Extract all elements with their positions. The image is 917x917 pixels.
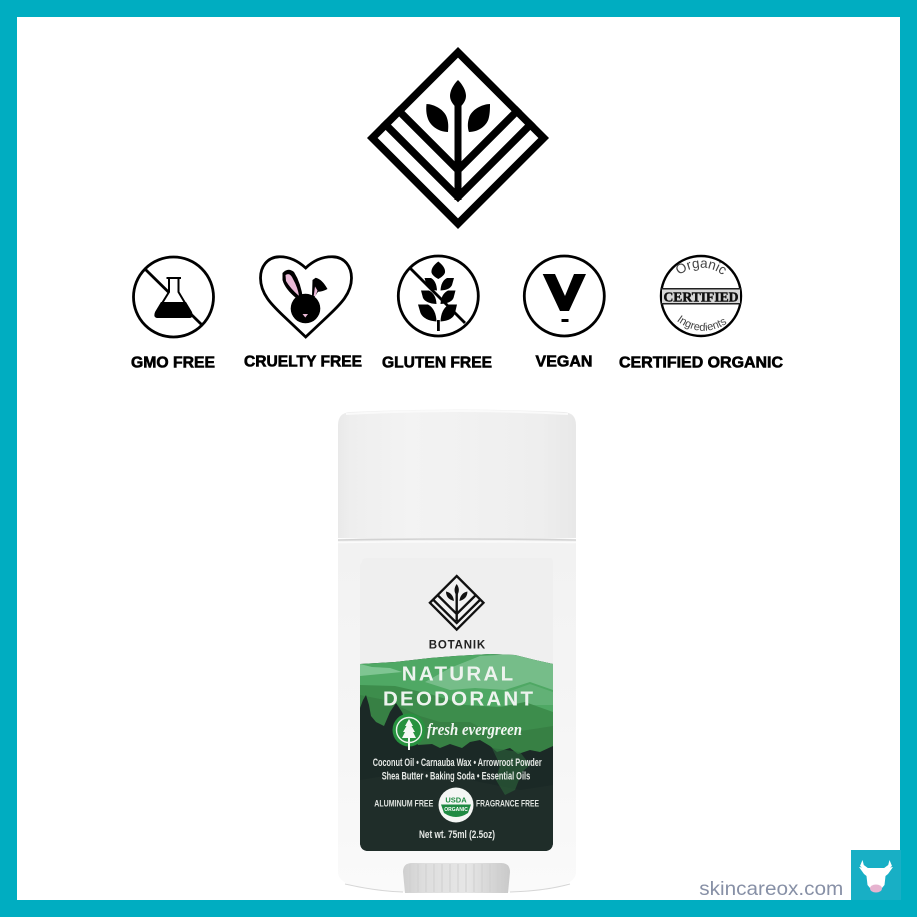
BOTANIK wordmark: BOTANIK [429,640,486,652]
feature labels: GMO FREE [131,354,215,372]
product title: DEODORANT [383,688,533,710]
bottle body [338,540,576,893]
mini logo [430,576,484,630]
rabbit head [291,294,320,323]
twist knob [403,863,510,893]
scent name: fresh evergreen [427,720,522,739]
USDA organic seal: ORGANIC [444,807,468,813]
net weight: Net wt. 75ml (2.5oz) [419,829,495,841]
deodorant stick product [338,410,576,893]
free-from claims [374,798,539,808]
left rabbit ear [282,270,303,299]
USDA organic seal: USDA [445,796,467,804]
feature labels: CRUELTY FREE [244,354,362,370]
icon: certified organic stamp: Organic [676,260,726,274]
ingredients list: Coconut Oil • Carnauba Wax • Arrowroot Powder [373,757,542,769]
free-from claims: ALUMINUM FREE [374,798,433,808]
icon: certified organic stamp [660,254,742,338]
tree silhouettes [360,695,553,860]
product title: NATURAL [402,662,513,686]
free-from claims: FRAGRANCE FREE [476,798,539,808]
site name: skincareox.com [699,878,843,900]
fresh evergreen badge [392,714,426,750]
icon: GMO free [134,257,214,337]
product title [383,662,533,710]
icon: vegan [524,256,604,336]
cap [338,410,576,540]
feature labels: VEGAN [536,354,592,370]
feature labels [131,354,783,372]
feature labels: CERTIFIED ORGANIC [619,354,783,372]
feature labels: GLUTEN FREE [382,354,492,372]
brand logo: diamond with plant [372,52,544,224]
ingredients list: Shea Butter • Baking Soda • Essential Oils [382,770,530,782]
icon: cruelty free heart with rabbit [260,257,352,337]
ingredients list [373,757,542,782]
right rabbit ear [312,278,328,297]
dark forest label [360,654,553,851]
icon: certified organic stamp: CERTIFIED [664,290,738,306]
USDA organic seal [438,788,474,822]
icon: certified organic stamp: Ingredients [677,315,726,331]
icon: gluten free wheat [398,256,478,336]
ox logo tile [851,850,901,900]
label paper [360,558,553,670]
